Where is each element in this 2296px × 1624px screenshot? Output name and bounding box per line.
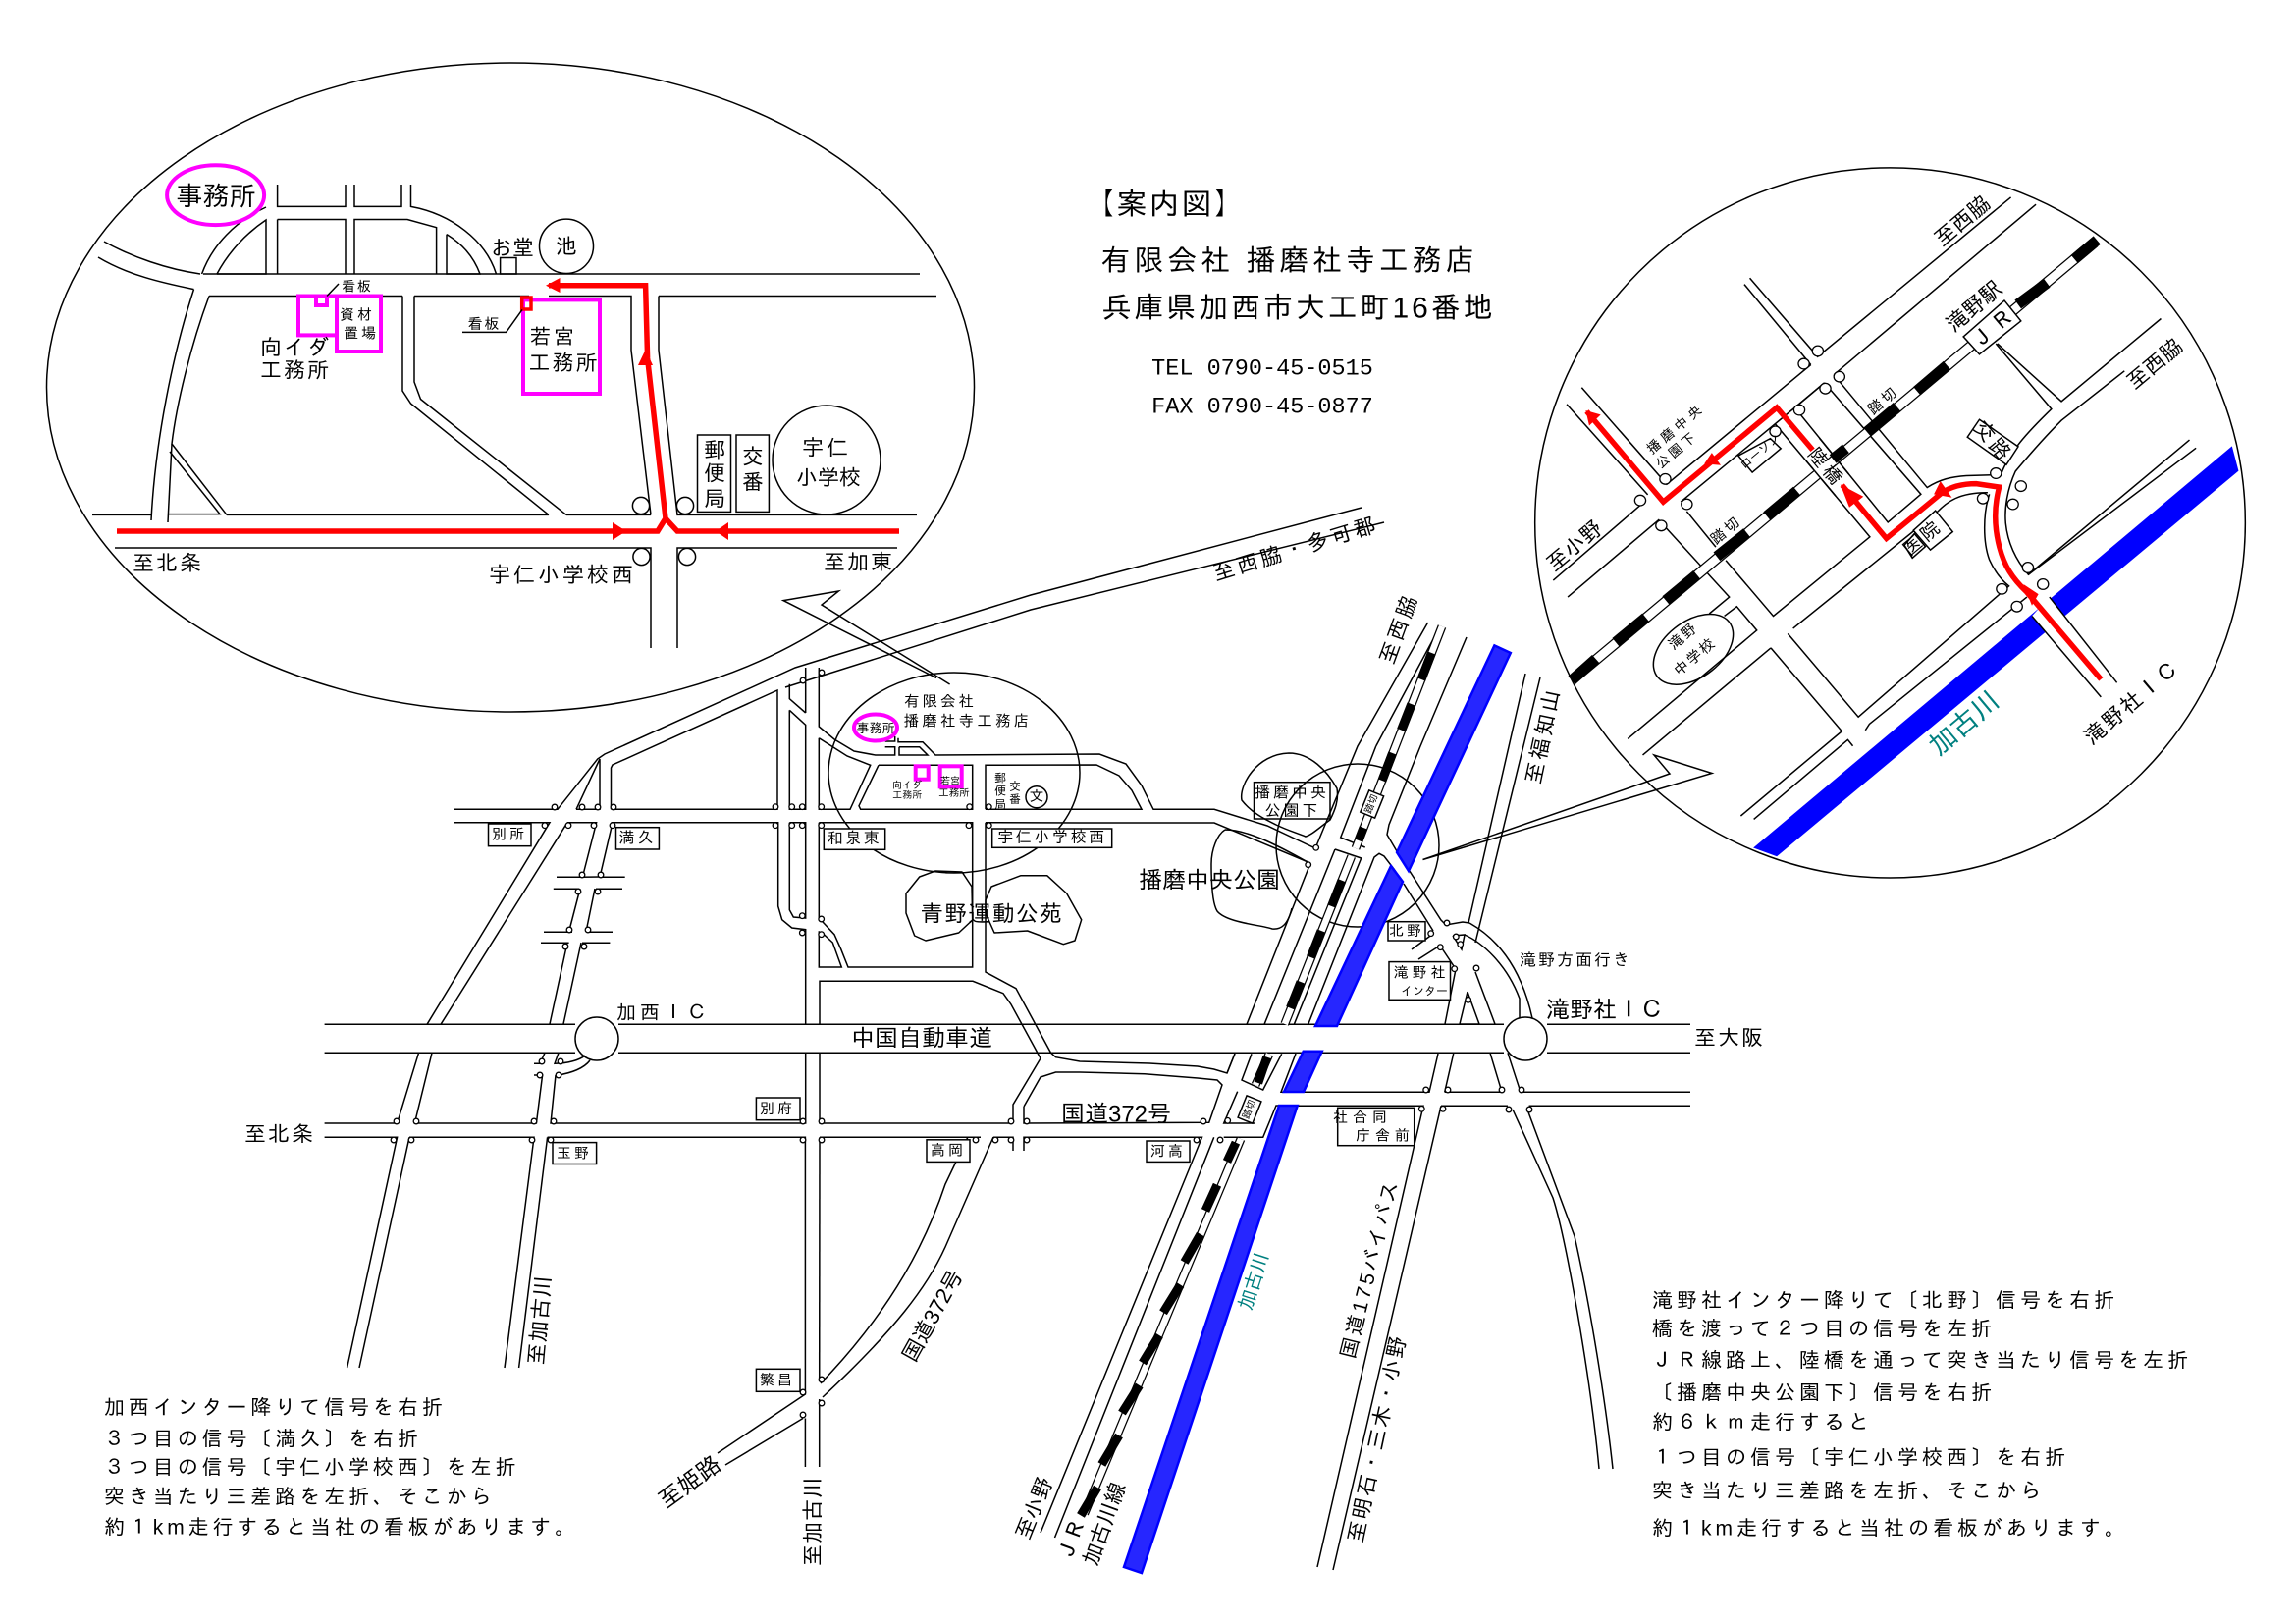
detail map labels: 至北条 [133, 551, 203, 575]
text block: directions from Takinoyashiro IC: １つ目の信号〔宇仁小学校西〕を右折 [1652, 1447, 2069, 1469]
detail map labels: 看板 [342, 279, 373, 295]
Takino map labels: 陸橋 [1803, 444, 1849, 492]
overview: place and road labels: 至北条 [244, 1121, 315, 1147]
cross streets on second road [541, 877, 622, 1024]
detail map labels: 看板 [467, 316, 501, 333]
text block: directions from Kasai IC [104, 1396, 579, 1540]
detail map labels: 置場 [344, 326, 379, 342]
detail map labels: 便 [704, 461, 725, 485]
overview: boxed intersection labels: 社合同 [1333, 1110, 1392, 1126]
heading and company address [1084, 187, 1496, 420]
heading and company address: TEL 0790-45-0515 [1151, 355, 1373, 383]
overview: place and road labels: 播磨社寺工務店 [904, 713, 1032, 731]
signals [1634, 346, 2049, 612]
overview: place and road labels: 滝野社ＩＣ [1546, 998, 1664, 1023]
overview: boxed intersection labels: インター [1401, 984, 1448, 998]
panel: detail map around the office [47, 63, 974, 712]
overview: place and road labels: 至西脇・多可郡 [1210, 512, 1381, 586]
signals [632, 497, 696, 566]
overview: place and road labels: ＪＲ [1053, 1515, 1091, 1564]
Takino map labels: ローソン [1737, 431, 1783, 472]
Takino map labels: 加古川 [1923, 685, 2005, 761]
detail map labels: 小学校 [796, 465, 861, 490]
overview: boxed intersection labels: 播磨中央 [1255, 784, 1329, 801]
overview: place and road labels: 至福知山 [1521, 684, 1566, 786]
label boxes [1738, 300, 2021, 558]
text block: directions from Takinoyashiro IC: 突き当たり三差路を左折、そこから [1652, 1481, 2045, 1502]
overview: place and road labels: 滝野方面行き [1520, 950, 1631, 970]
highway [325, 1017, 1690, 1060]
overview: place and road labels: 工務所 [938, 787, 970, 799]
railway: JR加古川線 on overview [1081, 626, 1442, 1515]
Takino map labels: 踏切 [1708, 513, 1745, 548]
text block: directions from Kasai IC: ３つ目の信号〔宇仁小学校西〕を左折 [104, 1457, 519, 1479]
callout pointer from overview to Takino map [1423, 755, 1712, 860]
detail map labels: 郵 [704, 438, 725, 462]
overview: place and road labels: 至大阪 [1694, 1025, 1765, 1051]
overview: boxed intersection labels: 滝野社 [1394, 964, 1449, 982]
red route [1585, 407, 2101, 679]
text block: directions from Takinoyashiro IC [1652, 1290, 2192, 1540]
text block: directions from Takinoyashiro IC: 約１km走行すると当社の看板があります。 [1652, 1518, 2129, 1540]
lower east-west road and side roads [325, 1053, 1690, 1570]
overview: place and road labels: 至明石・三木・小野 [1343, 1332, 1412, 1544]
panel: overview road network [325, 508, 1690, 1570]
overview: place and road labels: 郵 [994, 772, 1006, 785]
overview: boxed intersection labels [489, 783, 1451, 1391]
Takino map labels [1542, 190, 2187, 761]
overview: boxed intersection labels: 宇仁小学校西 [997, 829, 1107, 846]
overview: place and road labels: 向イダ [892, 780, 922, 791]
sign leader lines [327, 284, 522, 332]
text block: directions from Kasai IC: 約１km走行すると当社の看板があります。 [104, 1516, 579, 1540]
overview: boxed intersection labels: 別府 [760, 1101, 795, 1117]
panel: detail map around Takino station [1535, 168, 2245, 878]
detail map labels: 事務所 [177, 182, 255, 211]
school 宇仁小学校 [773, 406, 881, 514]
overview: place and road labels: 国道372号 [1061, 1102, 1171, 1127]
overview traffic signals [391, 670, 1532, 1418]
detail map labels: 交 [742, 444, 764, 469]
Takino map labels: 交路 [1969, 416, 2016, 467]
bridge break in railway [1806, 438, 1848, 496]
text block: directions from Takinoyashiro IC: 滝野社インター降りて〔北野〕信号を右折 [1652, 1290, 2118, 1312]
Takino map labels: 医院 [1899, 515, 1948, 561]
school symbol [1026, 786, 1047, 808]
text block: directions from Takinoyashiro IC: 橋を渡って２つ目の信号を左折 [1652, 1318, 1996, 1341]
pond 池 [540, 219, 593, 273]
overview: boxed intersection labels: 河高 [1150, 1143, 1186, 1161]
overview: place and road labels: 加西ＩＣ [616, 1002, 711, 1024]
Takino map labels: 踏切 [1865, 383, 1902, 418]
overview: place and road labels: 国道372号 [897, 1266, 968, 1366]
overview: boxed intersection labels: 北野 [1389, 923, 1424, 940]
overview: station boxes: 踏切 [1363, 793, 1381, 815]
overview: boxed intersection labels: 別所 [492, 827, 527, 842]
overview: place and road labels: 中国自動車道 [851, 1025, 992, 1053]
overview: boxed intersection labels: 和泉東 [828, 830, 881, 847]
heading and company address: FAX 0790-45-0877 [1151, 395, 1373, 420]
overview: place and road labels: 事務所 [856, 721, 895, 735]
upper east-west road [427, 508, 1540, 1123]
overview: magenta office markers [854, 715, 962, 786]
callout pointer from overview to detail map [783, 591, 950, 684]
detail map labels: 至加東 [824, 550, 894, 574]
text block: directions from Takinoyashiro IC: 〔播磨中央公園下〕信号を右折 [1652, 1382, 1996, 1404]
overview: place and road labels [244, 512, 1765, 1569]
overview: place and road labels: 文 [1029, 788, 1044, 805]
detail map labels: 宇仁小学校西 [489, 563, 636, 587]
overview: place and road labels: 至小野 [1011, 1474, 1058, 1543]
text block: directions from Kasai IC: ３つ目の信号〔満久〕を右折 [104, 1428, 422, 1451]
detail map labels: 向イダ [260, 336, 331, 359]
Takino map labels: 滝野駅 [1942, 276, 2006, 337]
text block: directions from Kasai IC: 突き当たり三差路を左折、そこから [104, 1487, 495, 1508]
Takino map labels: 公園下 [1652, 427, 1701, 472]
office marker ellipse [167, 165, 264, 225]
overview: place and road labels: 加古川 [1235, 1250, 1274, 1313]
Takino map labels: 至小野 [1542, 515, 1607, 576]
overview: boxed intersection labels: 公園下 [1264, 803, 1321, 820]
overview: place and road labels: 播磨中央公園 [1139, 868, 1280, 893]
text block: directions from Kasai IC: 加西インター降りて信号を右折 [104, 1396, 447, 1420]
overview: place and road labels: 工務所 [892, 789, 922, 801]
park blobs [906, 753, 1338, 945]
overview: boxed intersection labels: 満久 [618, 831, 656, 846]
white road over river [2032, 597, 2117, 697]
overview: place and road labels: 局 [994, 797, 1006, 811]
overview: boxed intersection labels: 庁舎前 [1356, 1127, 1415, 1145]
detail map labels: お堂 [491, 236, 534, 260]
overview: boxed intersection labels: 玉野 [557, 1145, 592, 1163]
text block: directions from Takinoyashiro IC: ＪＲ線路上、陸橋を通って突き当たり信号を左折 [1652, 1349, 2192, 1373]
overview: place and road labels: 有限会社 [904, 693, 977, 711]
overview: station boxes [1238, 790, 1384, 1123]
overview: place and road labels: 交 [1009, 780, 1021, 793]
overview: boxed intersection labels: 繁昌 [760, 1371, 795, 1388]
pointer ellipses [828, 673, 1439, 927]
detail map labels: 工務所 [528, 351, 599, 375]
detail map labels: 若宮 [530, 326, 577, 349]
overview: place and road labels: 国道175バイパス [1337, 1176, 1404, 1361]
heading and company address: 兵庫県加西市大工町16番地 [1101, 293, 1496, 324]
railway [1575, 243, 2095, 677]
magenta site boxes [298, 297, 600, 394]
overview: place and road labels: 至姫路 [654, 1451, 726, 1514]
Takino map labels: ＪＲ [1966, 300, 2023, 353]
overview: place and road labels: 番 [1009, 792, 1021, 806]
heading and company address: 有限会社 播磨社寺工務店 [1100, 245, 1479, 277]
overview: place and road labels: 至西脇 [1374, 589, 1423, 668]
Takino map labels: 至西脇 [2122, 334, 2187, 394]
detail map labels: 番 [742, 469, 764, 495]
overview: place and road labels: 加古川線 [1078, 1479, 1131, 1569]
sign marker (red) [522, 298, 531, 309]
detail map labels [133, 182, 894, 587]
river [1753, 446, 2238, 856]
detail map labels: 工務所 [260, 357, 331, 383]
overview: place and road labels: 至加古川 [801, 1476, 825, 1566]
Takino map labels: 中学校 [1671, 634, 1720, 679]
heading and company address: 【案内図】 [1084, 187, 1247, 222]
river: overview 加古川 [1124, 645, 1511, 1573]
overview: place and road labels: 至加古川 [524, 1273, 556, 1366]
Takino map labels: 滝野社ＩＣ [2079, 655, 2185, 749]
detail map labels: 資材 [340, 306, 375, 324]
post office box [697, 435, 730, 512]
police box [736, 435, 769, 512]
detail map labels: 局 [704, 487, 725, 511]
overview: station boxes: 踏切 [1241, 1099, 1258, 1120]
overview: place and road labels: 若宮 [940, 776, 960, 787]
building: temple お堂 [501, 257, 516, 274]
detail map labels: 宇仁 [802, 436, 851, 460]
text block: directions from Takinoyashiro IC: 約６ｋｍ走行すると [1652, 1412, 1873, 1434]
Takino map labels: 滝野 [1666, 620, 1701, 653]
Takino map labels: 至西脇 [1930, 190, 1995, 251]
Takino map labels: 播磨中央 [1643, 400, 1708, 457]
red route [117, 278, 899, 540]
overview: place and road labels: 青野運動公苑 [921, 901, 1063, 927]
overview: place and road labels: 便 [994, 785, 1006, 798]
overview: boxed intersection labels: 高岡 [931, 1143, 966, 1159]
detail map labels: 池 [556, 234, 577, 259]
